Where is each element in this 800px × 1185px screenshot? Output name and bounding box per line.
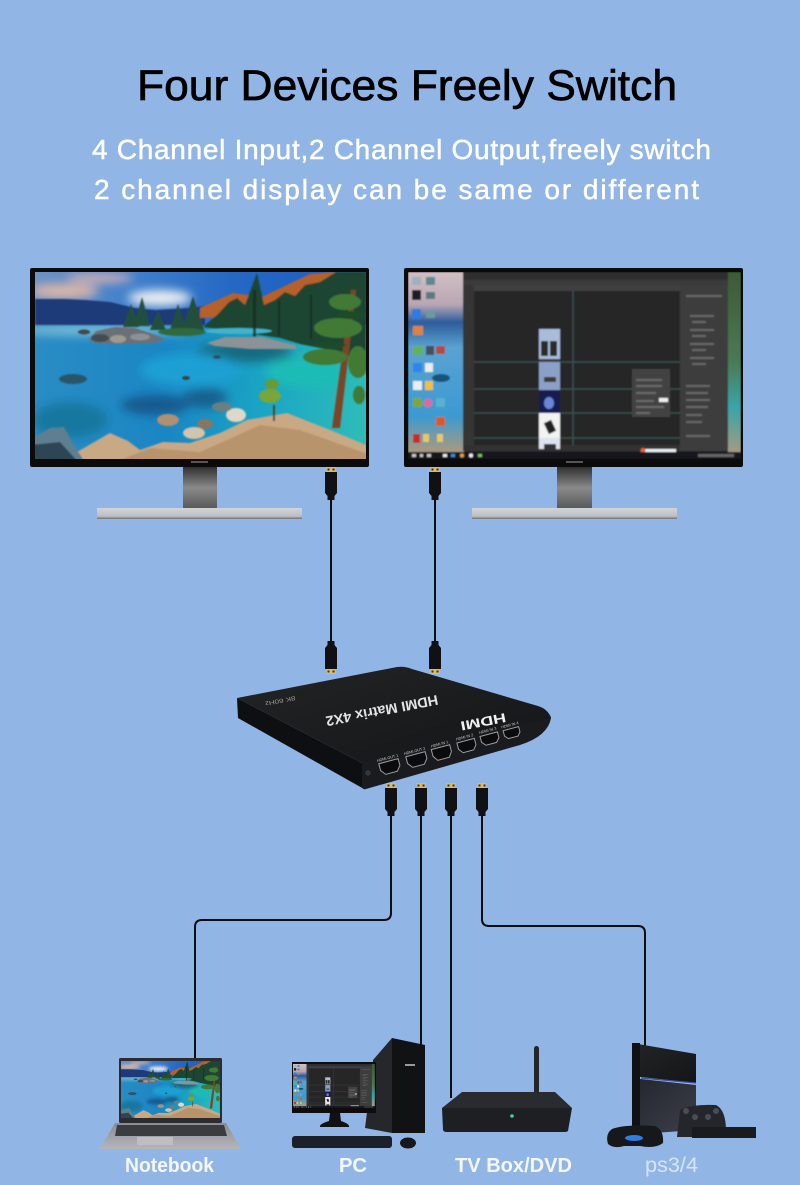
HDMI plug to PC cable (415, 783, 427, 816)
output port 1: HDMI OUT 1 (377, 754, 399, 763)
laptop deck (100, 1123, 241, 1149)
input port 4: HDMI IN 4 (501, 721, 519, 729)
PC monitor stand (320, 1113, 349, 1127)
output port 2 (404, 747, 429, 769)
input port 1: HDMI IN 1 (431, 740, 449, 749)
product name: HDMI Matrix 4X2 (324, 692, 439, 730)
label: PC: PC (339, 1155, 367, 1177)
input port 4 (501, 721, 522, 740)
landscape screen (10, 272, 371, 464)
input port 3 (479, 727, 500, 746)
cable to PS console (482, 812, 645, 1046)
monitor bezel (404, 268, 743, 467)
desktop PC (292, 1038, 425, 1148)
controller light (625, 1135, 643, 1141)
power jack (366, 771, 370, 775)
top surface (237, 667, 551, 763)
front controller (607, 1125, 663, 1147)
trackpad (137, 1137, 173, 1145)
monitor stand base (472, 508, 677, 519)
output port 2: HDMI OUT 2 (404, 747, 426, 756)
rear controller (677, 1105, 726, 1137)
console upper body (632, 1043, 696, 1083)
HDMI plug at right monitor (429, 467, 441, 500)
keyboard (292, 1136, 392, 1148)
cable to PC (420, 812, 422, 1046)
input port 2 (455, 733, 477, 754)
console light bar (641, 1078, 696, 1083)
monitor stand base (97, 508, 302, 519)
laptop screen (113, 1061, 221, 1120)
HDMI plug to PS cable (476, 783, 488, 816)
monitor stand neck (183, 467, 217, 509)
HDMI plug at matrix top left (325, 641, 337, 674)
subtitle line 2: 2 channel display can be same or different (94, 174, 699, 205)
HDMI plug at matrix top right (429, 641, 441, 674)
title: Four Devices Freely Switch (137, 62, 677, 110)
label: TV Box/DVD: TV Box/DVD (455, 1155, 572, 1177)
PS console set (607, 1043, 756, 1147)
label: Notebook: Notebook (125, 1155, 215, 1177)
console lower body (632, 1078, 696, 1134)
monitor stand neck (557, 467, 592, 509)
HDMI logo: HDMI (459, 710, 507, 734)
box top (442, 1092, 572, 1108)
mouse (400, 1138, 416, 1148)
laptop lid (119, 1058, 222, 1123)
right monitor (404, 268, 743, 519)
cable to TV box (450, 812, 452, 1098)
cable from right monitor to matrix (434, 495, 436, 645)
PC monitor frame (292, 1062, 376, 1113)
console side slat (632, 1043, 640, 1133)
left monitor (10, 268, 371, 519)
HDMI matrix 4x2 switch (237, 667, 551, 789)
notebook (100, 1058, 241, 1149)
PC monitor screen (293, 1064, 375, 1108)
front face (362, 712, 551, 789)
output port 1 (377, 754, 402, 776)
keyboard (115, 1125, 227, 1136)
brand mark (566, 461, 583, 463)
label: ps3/4: ps3/4 (645, 1154, 698, 1177)
TV box (442, 1046, 572, 1132)
input port 1 (430, 740, 453, 761)
subtitle line 1: 4 Channel Input,2 Channel Output,freely switch (92, 134, 711, 165)
rear controller sticks (683, 1108, 719, 1120)
input port 2: HDMI IN 2 (456, 733, 474, 742)
status LED (510, 1114, 514, 1118)
HDMI plug to notebook cable (385, 783, 397, 816)
spec label: 8K 60Hz (264, 694, 296, 706)
camera bar (692, 1127, 756, 1138)
monitor bezel (30, 268, 369, 467)
HDMI plug to TV box cable (445, 783, 457, 816)
input port 3: HDMI IN 3 (479, 727, 497, 735)
cable to notebook (195, 812, 391, 1060)
antenna (534, 1046, 539, 1094)
PC tower (365, 1038, 425, 1133)
HDMI plug at left monitor (325, 467, 337, 500)
left side face (237, 698, 364, 789)
box front (442, 1108, 572, 1132)
photoshop screen (408, 272, 741, 459)
cable from left monitor to matrix (330, 495, 332, 645)
brand mark (191, 461, 208, 463)
